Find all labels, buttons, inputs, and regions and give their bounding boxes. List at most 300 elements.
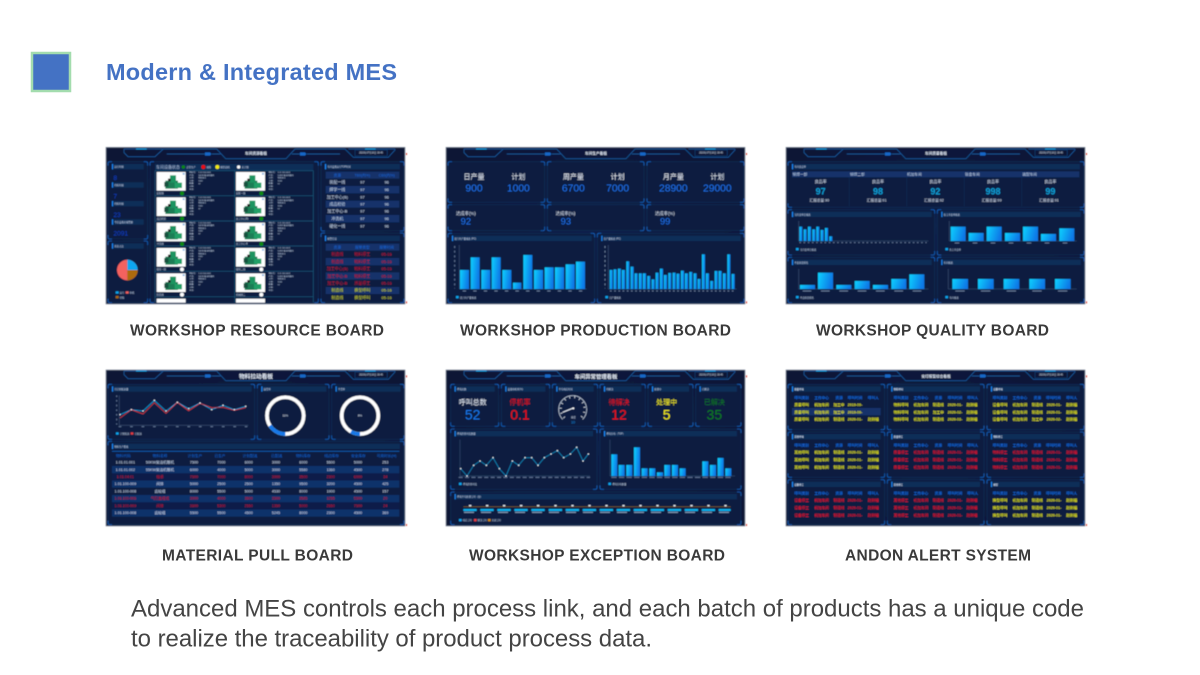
material table: 24 <box>383 504 387 508</box>
OEE table panel: 96 <box>384 216 390 221</box>
alert card: material stop: 机加车间 <box>1013 457 1028 462</box>
KPI cards: 平均响应时间 <box>559 387 573 391</box>
material table: 4500 <box>354 511 362 515</box>
material table: 4500 <box>354 468 362 472</box>
alert card: quality stop: 质量停工 <box>894 457 909 462</box>
alert card: material call: 机加车间 <box>914 402 929 407</box>
OEE table panel: 96 <box>384 201 390 206</box>
KPI cards: 呼叫总数 <box>457 387 467 391</box>
device status panel: 正常生产 <box>186 165 196 169</box>
material table: 5000 <box>190 482 198 486</box>
pie chart panel <box>108 241 148 303</box>
material table: 5500 <box>217 489 225 493</box>
KPI cards: 已解决 <box>704 397 725 406</box>
left status panel: 8 <box>113 175 117 182</box>
line chart: on-time delivery: 已配送 <box>135 432 142 436</box>
alert card: other stop: 呼叫时间 <box>948 491 963 496</box>
alert card: quality stop: 质量停工 <box>894 435 904 439</box>
material table: 3500 <box>245 497 253 501</box>
material table: 5000 <box>354 461 362 465</box>
device status panel: 加工中心(B) <box>236 216 249 220</box>
device status panel: 加工中心-B <box>236 242 248 246</box>
alert card: other call: 2020-01- <box>848 465 863 469</box>
yield by workshop panel: 汇报总量:99 <box>982 197 1002 202</box>
alert card: equipment call: 设备呼叫 <box>993 417 1008 422</box>
alert card: quality stop: 质量停工 <box>894 464 909 469</box>
gauge <box>559 396 587 425</box>
alert card: equipment stop: 设备停工 <box>794 505 809 510</box>
material table: 369 <box>382 511 388 515</box>
alert card: quality call: 制造线 <box>834 417 845 422</box>
material table: 55KW柴油机雕机 <box>146 467 174 472</box>
alert card: equipment call: 呼叫类别 <box>993 395 1008 400</box>
OEE table panel: 97 <box>360 194 365 199</box>
alarm table panel: 制造线 <box>331 287 343 293</box>
material table: 1350 <box>272 482 280 486</box>
alert card: equipment call: 呼叫时间 <box>1046 395 1061 400</box>
alert card: material stop: 制造线 <box>1032 457 1043 462</box>
alert card: changeover: 资源 <box>1034 491 1041 496</box>
material table: 1.01.100-008 <box>115 489 136 493</box>
alarm table panel: 05-16 <box>382 288 393 293</box>
material table: 8000 <box>299 511 307 515</box>
alarm table panel: 05-16 <box>382 295 393 300</box>
OEE table panel <box>321 162 404 231</box>
material table: 2500 <box>217 482 225 486</box>
alert card: quality call: 质量呼叫 <box>794 402 809 407</box>
KPI cards: 0.1 <box>510 406 530 422</box>
output KPI cards <box>448 162 744 202</box>
alert card: other stop: 其他停工 <box>894 505 909 510</box>
alert card: changeover: 机加车间 <box>1013 498 1028 503</box>
alert card: other call: 呼叫类别 <box>794 443 809 448</box>
yield by workshop panel: 车间良品率 <box>794 165 807 169</box>
material table: 8000 <box>190 489 198 493</box>
alert card: material stop: 赵刚福 <box>1066 450 1077 455</box>
material table: 3000 <box>272 461 280 465</box>
alert card: equipment call: 制造线 <box>1032 402 1043 407</box>
alert card: material stop: 制造线 <box>1032 464 1043 469</box>
material table: 1350 <box>272 504 280 508</box>
alert card: quality call: 机加车间 <box>814 402 829 407</box>
alert card: other stop: 工作中心 <box>914 491 929 496</box>
alert card: material call: 物料呼叫 <box>894 409 909 414</box>
KPI cards: 待解决 <box>609 397 629 406</box>
material table: 2650 <box>327 504 335 508</box>
bar chart: calls by type: 呼叫分布（TOP） <box>606 432 625 436</box>
alert card: material call: 2020-03- <box>948 418 963 422</box>
alert card: other call: 赵刚福 <box>868 450 879 455</box>
alert card: equipment call: 呼叫人 <box>1066 395 1077 400</box>
material table: 8000 <box>299 489 307 493</box>
material table: 9500 <box>299 482 307 486</box>
gauge: 10 <box>571 421 575 425</box>
material table: 5245 <box>272 511 280 515</box>
OEE table panel: 97 <box>360 209 365 214</box>
body text <box>131 596 1084 652</box>
material table: 线边库存 <box>324 453 339 458</box>
output KPI cards: 1000 <box>507 183 530 194</box>
device status panel: 无计划 <box>242 165 249 169</box>
material table: 1255 <box>327 497 335 501</box>
output KPI cards: 月产量 <box>663 172 684 181</box>
caption: workshop resource board: WORKSHOP RESOURCE BOARD <box>130 322 384 340</box>
caption: material pull board: MATERIAL PULL BOARD <box>162 548 353 564</box>
bar chart: monthly yield: 当月良率日报表 <box>794 212 811 216</box>
device status panel: 机械线二 <box>236 292 246 296</box>
alert card: changeover: 2020-01- <box>1047 506 1062 510</box>
alert card: changeover: 2020-01- <box>1047 499 1062 503</box>
bar chart: process yield <box>937 210 1084 255</box>
alert card: quality call: 工作中心 <box>814 395 829 400</box>
alert card: changeover: 工作中心 <box>1013 491 1028 496</box>
device status panel: 硬化一线 <box>157 267 167 271</box>
alert card: quality call: 加工中 <box>834 409 845 414</box>
alert card: equipment stop: 资源 <box>835 491 843 496</box>
output KPI cards: 周产量 <box>563 172 584 181</box>
alert card: equipment call: 设备呼叫 <box>993 387 1003 391</box>
achievement rate cards: 92 <box>461 217 471 227</box>
KPI cards: 处理中 <box>654 387 662 391</box>
alert card: material stop: 机加车间 <box>1013 450 1028 455</box>
device status panel: 制造线 <box>157 292 164 296</box>
KPI cards: 12 <box>611 406 627 422</box>
achievement rate cards: 达成率(%) <box>655 210 675 217</box>
alert card: equipment call: 机加车间 <box>1013 402 1028 407</box>
material table: 5500 <box>354 497 362 501</box>
alarm table panel: 换型呼叫 <box>354 287 370 293</box>
alert card: quality stop: 工作中心 <box>914 443 929 448</box>
alert card: equipment stop: 机加车间 <box>814 512 829 517</box>
alert card: changeover: 换型 <box>993 482 999 486</box>
timeline chart <box>451 492 741 525</box>
alert card: other stop: 制造线 <box>933 512 944 517</box>
alert card: material call: 物料呼叫 <box>894 387 904 391</box>
alert card: quality stop: 机加车间 <box>914 450 929 455</box>
material table: 5300 <box>217 504 225 508</box>
alert card: other call: 赵刚福 <box>868 457 879 462</box>
alert card: equipment call <box>987 384 1084 430</box>
yield by workshop panel: 良品率 <box>929 178 941 184</box>
KPI cards: 52 <box>465 406 481 422</box>
alert card: other call: 制造线 <box>834 457 845 462</box>
alert card: changeover: 赵刚福 <box>1066 498 1077 503</box>
alert card: equipment call: 赵刚福 <box>1066 417 1077 422</box>
alert card: equipment call: 2020-01- <box>1047 403 1062 407</box>
output KPI cards: 计划 <box>611 172 625 181</box>
panel: workshop production board <box>446 147 747 304</box>
alert card: other call: 2020-01- <box>848 458 863 462</box>
KPI cards: 5 <box>663 406 671 422</box>
alert card: material stop: 制造线 <box>1032 450 1043 455</box>
alert card: material call: 物料呼叫 <box>894 402 909 407</box>
KPI cards: 呼叫总数 <box>459 397 487 406</box>
device status panel <box>150 162 318 303</box>
alert card: material call: 加工中 <box>933 409 944 414</box>
alert card: material call: 赵刚福 <box>967 417 978 422</box>
material table: 4500 <box>354 489 362 493</box>
material table: 4500 <box>245 511 253 515</box>
OEE table panel: 96 <box>384 209 390 214</box>
material table: 5500 <box>190 511 198 515</box>
alert card: other call: 制造线 <box>834 464 845 469</box>
alert card: other stop: 2020-01- <box>948 513 963 517</box>
bar chart: defect items: 不良原因排名 <box>794 260 808 264</box>
alert card: quality call: 质量呼叫 <box>794 387 804 391</box>
KPI cards: 待解决 <box>606 387 614 391</box>
alert card: changeover: 制造线 <box>1032 512 1043 517</box>
material table: 齿轮组 <box>155 510 166 515</box>
alert card: quality stop: 赵刚福 <box>967 457 978 462</box>
alert card: material stop: 呼叫人 <box>1066 443 1077 448</box>
material table: 3200 <box>327 482 335 486</box>
alert card: other call: 机加车间 <box>814 457 829 462</box>
alert card: equipment stop: 2020-01- <box>848 513 863 517</box>
alarm table panel: 报警时间 <box>379 244 394 249</box>
yield by workshop panel: 汇报总量:90 <box>809 197 829 202</box>
alert card: changeover: 制造线 <box>1032 505 1043 510</box>
alert card: equipment stop: 设备停工 <box>794 498 809 503</box>
left status panel: 2091 <box>113 231 128 238</box>
material table: 3000 <box>272 468 280 472</box>
material table: 物料生产看板 <box>114 444 129 448</box>
alert card: quality call: 2019-09- <box>848 410 863 414</box>
line chart: on-time delivery <box>108 384 255 439</box>
achievement rate cards <box>448 205 744 231</box>
alarm table panel: 报警信息 <box>327 236 337 240</box>
panel: workshop exception board <box>446 370 747 526</box>
material table: 1.01.01.001 <box>116 461 135 465</box>
alarm table panel: 物料停工 <box>354 265 370 271</box>
output KPI cards: 7000 <box>606 183 629 194</box>
alert card: material call: 呼叫时间 <box>948 395 963 400</box>
alert card: changeover: 呼叫类别 <box>993 491 1008 496</box>
alert card: material stop: 物料停工 <box>993 450 1008 455</box>
donut chart: overstock rate: 8% <box>358 414 362 418</box>
yield by workshop panel: 汇报总量:91 <box>867 197 887 202</box>
left status panel: 7 <box>113 193 117 200</box>
OEE table panel: 97 <box>360 223 365 228</box>
material table: 5500 <box>217 511 225 515</box>
material table: 7500 <box>190 475 198 479</box>
alert card: changeover: 呼叫时间 <box>1046 491 1061 496</box>
alert card: other call: 工作中心 <box>814 443 829 448</box>
yield by workshop panel: 铆焊二部 <box>850 172 865 177</box>
material table: 1360 <box>327 468 335 472</box>
material table: 2300 <box>327 475 335 479</box>
alarm table panel: 加工中心-B <box>327 272 348 278</box>
alert card: material call: 呼叫人 <box>967 395 978 400</box>
OEE table panel: 成品检验 <box>329 200 345 206</box>
achievement rate cards: 99 <box>660 217 670 227</box>
material table: 4500 <box>354 482 362 486</box>
alert card: material call <box>887 384 984 430</box>
yield by workshop panel: 99 <box>1045 186 1055 196</box>
output KPI cards: 28900 <box>659 183 688 194</box>
bar chart: monthly yield: 当月良率日报表 <box>800 247 817 251</box>
material table: 253 <box>382 461 388 465</box>
alert card: changeover: 换型呼叫 <box>993 498 1008 503</box>
bar chart: defect items <box>788 257 935 303</box>
material table: 7500 <box>190 461 198 465</box>
material table: 1.01.100-006 <box>115 497 136 501</box>
alert card: equipment call: 加工中 <box>1032 417 1043 422</box>
alert card: quality call <box>788 384 885 430</box>
alarm table panel: 质量停工 <box>354 280 370 286</box>
machine image cards <box>157 172 265 303</box>
alert card: equipment stop: 呼叫人 <box>868 491 879 496</box>
material table: 6000 <box>245 461 253 465</box>
line chart: on-time delivery: 计划配送 <box>120 432 130 436</box>
pie chart panel: 停机 <box>130 291 135 295</box>
yield by workshop panel: 良品率 <box>1044 178 1056 184</box>
alert card: quality stop: 2020-01- <box>948 451 963 455</box>
device status panel: 冲洗线 <box>157 242 164 246</box>
line chart: on-time delivery: 月计划配送量 <box>114 387 129 391</box>
alert card: equipment call: 机加车间 <box>1013 417 1028 422</box>
timeline chart: 解决工时 <box>478 518 488 522</box>
alert card: other stop <box>887 480 984 525</box>
alert card: other call: 制造线 <box>834 450 845 455</box>
material table: 7000 <box>217 475 225 479</box>
bar chart: monthly output: 周六时产量报表 <box>460 295 477 299</box>
material table: 34 <box>383 475 387 479</box>
material table: 278 <box>382 468 388 472</box>
yield by workshop panel: 钣金车间 <box>965 172 980 177</box>
alert card: quality call: 机加车间 <box>814 417 829 422</box>
material table: 20 <box>383 497 387 501</box>
alert card: other stop: 其他停工 <box>894 498 909 503</box>
alert card: equipment stop: 工作中心 <box>814 491 829 496</box>
alert card: other call: 其他呼叫 <box>794 435 804 439</box>
alarm table panel: 资源 <box>334 244 341 249</box>
alert card: material stop: 物料停工 <box>993 457 1008 462</box>
alarm table panel: 05-16 <box>382 281 393 286</box>
slide title icon <box>32 53 70 91</box>
line chart: call trend: 呼叫趋势时段 <box>463 482 478 486</box>
alert card: equipment stop: 2020-01- <box>848 499 863 503</box>
KPI cards: 35 <box>707 406 722 422</box>
alert card: other stop: 呼叫类别 <box>894 491 909 496</box>
material table: 5000 <box>245 489 253 493</box>
timeline chart: 响应工时 <box>463 518 473 522</box>
alert card: quality stop: 质量停工 <box>894 450 909 455</box>
panel: workshop quality board <box>786 147 1087 304</box>
alert card: other stop: 其他停工 <box>894 512 909 517</box>
alarm table panel: 制造线 <box>331 251 343 257</box>
material table <box>108 441 404 525</box>
alert card: changeover <box>987 480 1084 525</box>
OEE table panel: 焊学一线 <box>329 186 345 192</box>
alarm table panel: 报警类型 <box>355 244 370 249</box>
alert card: material stop: 机加车间 <box>1013 464 1028 469</box>
caption: andon alert system: ANDON ALERT SYSTEM <box>845 548 1031 564</box>
panel: workshop resource board: 车间资源看板 <box>245 151 267 156</box>
bar chart: process yield: 各工序良率报表 <box>944 212 961 216</box>
alert card: equipment stop: 赵刚福 <box>868 505 879 510</box>
OEE table panel: 加工中心-B <box>327 208 348 214</box>
material table: 1900 <box>327 489 335 493</box>
material table: 气缸盖组成 <box>151 496 169 501</box>
OEE table panel: 97 <box>360 187 365 192</box>
yield by workshop panel: 机加车间 <box>907 172 922 177</box>
alert card: material stop: 物料停工 <box>993 435 1003 439</box>
yield by workshop panel: 98 <box>873 186 883 196</box>
left status panel: 今日设备总报警数 <box>114 220 134 224</box>
device status panel: 车间设备状态 <box>156 164 180 170</box>
OEE table panel: 资源 <box>334 172 341 177</box>
alert card: equipment stop: 2020-01- <box>848 506 863 510</box>
alert card: other call <box>788 432 885 477</box>
machine details <box>189 170 294 292</box>
alert card: material stop: 2020-01- <box>1047 465 1062 469</box>
material table: 1.01.04.01 <box>117 475 134 479</box>
alert card: equipment call: 机加车间 <box>1013 409 1028 414</box>
alert card: other stop: 机加车间 <box>914 505 929 510</box>
alert card: equipment call: 制造线 <box>1032 409 1043 414</box>
line chart: call trend: 呼叫趋势时段数量 <box>457 432 476 436</box>
alert card: quality call: 质量呼叫 <box>794 409 809 414</box>
alert card: other call: 其他呼叫 <box>794 457 809 462</box>
material table: 157 <box>382 489 388 493</box>
panel: material pull board: 物料拉动看板 <box>239 372 273 380</box>
alert card: material call: 工作中心 <box>914 395 929 400</box>
alert card: quality call: 呼叫类别 <box>794 395 809 400</box>
alarm table panel: 05-16 <box>382 259 393 264</box>
alert card: changeover: 换型呼叫 <box>993 505 1008 510</box>
material table: 7000 <box>217 461 225 465</box>
alert card: other call: 呼叫人 <box>868 443 879 448</box>
bar chart: daily output: 日产量报表 <box>609 295 622 299</box>
alert card: changeover: 机加车间 <box>1013 512 1028 517</box>
line chart: call trend <box>451 429 597 489</box>
alarm table panel: 05-16 <box>382 266 393 271</box>
bar chart: monthly output <box>448 233 595 303</box>
body text: to realize the traceability of product process data. <box>131 626 652 652</box>
KPI cards: 设备停机率(%) <box>508 387 523 391</box>
material table: 1.01.100-009 <box>115 482 136 486</box>
alert card: equipment call: 设备呼叫 <box>993 402 1008 407</box>
alert card: equipment call: 工作中心 <box>1013 395 1028 400</box>
output KPI cards: 6700 <box>562 183 585 194</box>
body text: Advanced MES controls each process link, and each batch of products has a unique code <box>131 596 1084 622</box>
bar chart: calls by type: 呼叫分布数量 <box>612 482 627 486</box>
material table: 3000 <box>272 475 280 479</box>
panel: material pull board <box>106 370 407 526</box>
alert card: other call: 资源 <box>835 443 843 448</box>
donut chart: overstock rate <box>332 384 404 439</box>
material table: 可用时长(H) <box>377 453 397 458</box>
alert card: equipment call: 设备呼叫 <box>993 409 1008 414</box>
bar chart: inspection: 车间报表 <box>949 295 959 299</box>
alarm table panel: 换型呼叫 <box>354 294 370 300</box>
bar chart: monthly yield <box>788 210 935 255</box>
material table: 4000 <box>217 468 225 472</box>
achievement rate cards: 93 <box>561 217 571 227</box>
bar chart: daily output: 日产量报表 (PC) <box>604 236 621 240</box>
KPI cards: 处理中 <box>656 397 677 406</box>
material table: 3585 <box>299 497 307 501</box>
bar chart: defect items: 不良原因排名 <box>800 295 814 299</box>
material table: 安全库存 <box>351 453 366 458</box>
alert card: equipment stop <box>788 480 885 525</box>
yield by workshop panel: 良品率 <box>872 178 884 184</box>
caption: workshop quality board: WORKSHOP QUALITY BOARD <box>816 322 1049 340</box>
alert card: material call: 2020-01- <box>948 403 963 407</box>
OEE table panel: 硬化一线 <box>329 222 345 228</box>
material table: 2550 <box>245 504 253 508</box>
alert card: equipment stop: 制造线 <box>834 505 845 510</box>
